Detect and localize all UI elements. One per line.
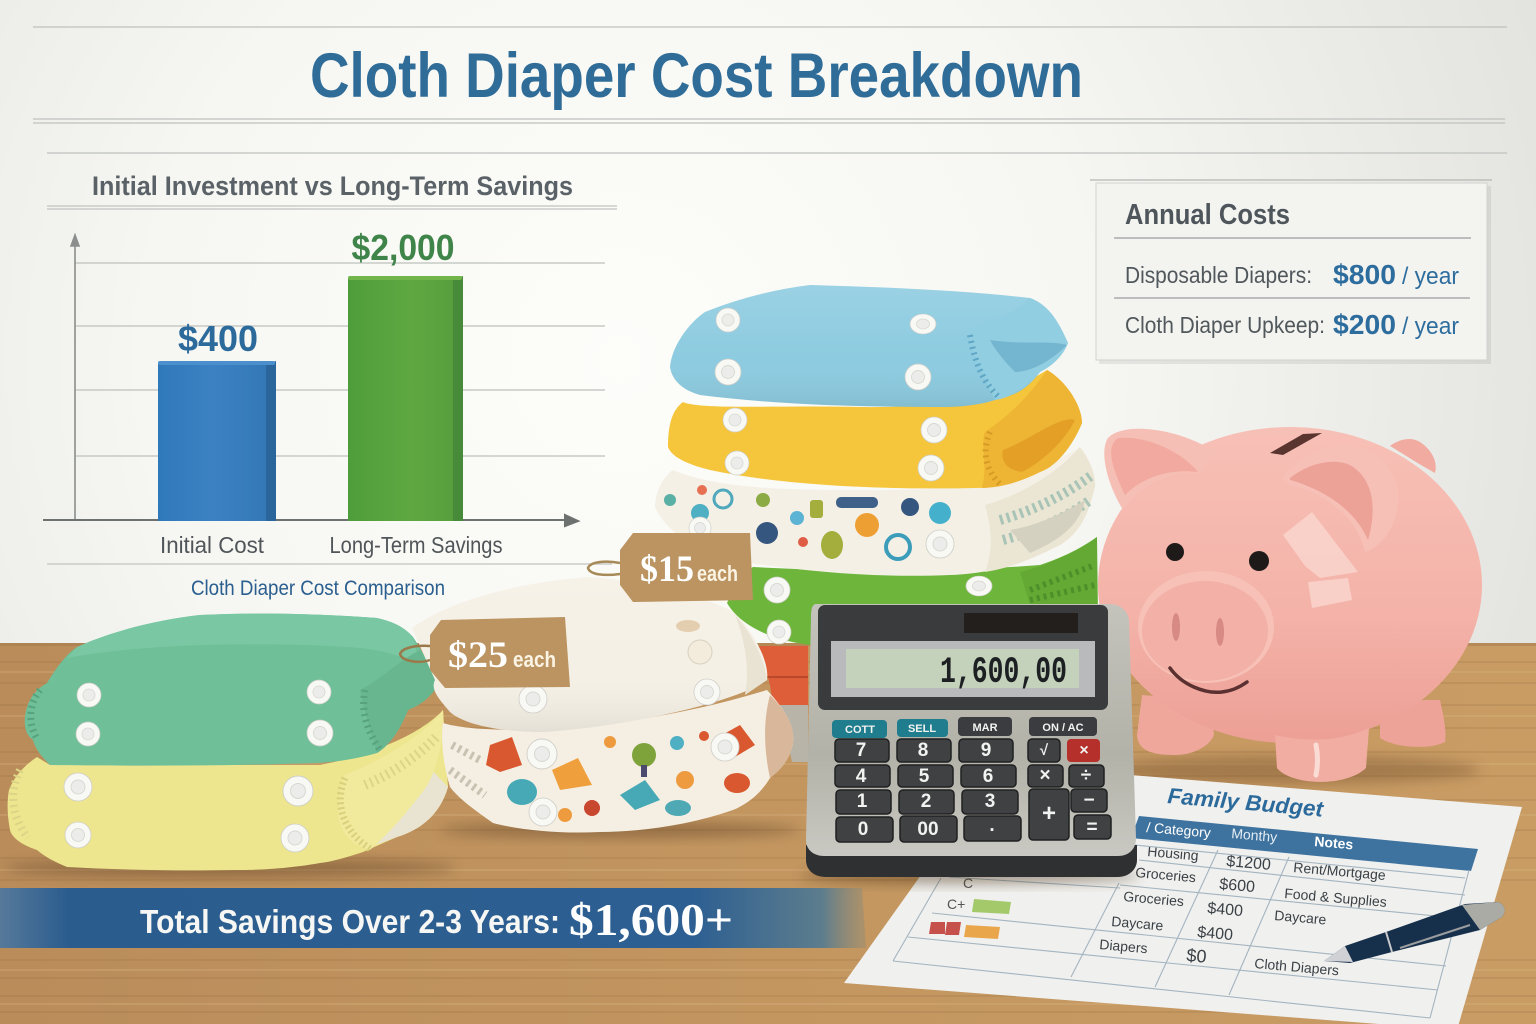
patterned diaper xyxy=(655,447,1095,576)
table header xyxy=(1131,816,1478,871)
keypad: . xyxy=(989,815,995,836)
cloth row: / year xyxy=(1402,313,1459,340)
table rows: Cloth Diapers xyxy=(1254,955,1340,978)
keypad: 6 xyxy=(983,766,993,787)
table rows: Daycare xyxy=(1274,907,1327,928)
piggy bank xyxy=(1098,427,1482,784)
nostrils xyxy=(1172,613,1224,646)
highlight xyxy=(1283,512,1358,608)
display xyxy=(831,641,1095,697)
cloth row: Cloth Diaper Upkeep: xyxy=(1125,312,1325,338)
keypad: SELL xyxy=(908,723,936,735)
green diaper xyxy=(25,614,437,766)
table rows: Diapers xyxy=(1099,936,1148,956)
table rows xyxy=(1099,843,1387,978)
y axis xyxy=(71,235,79,520)
blue diaper xyxy=(670,285,1068,407)
table rows: Rent/Mortgage xyxy=(1293,859,1387,883)
table rows: Groceries xyxy=(1135,864,1197,885)
price tag: $25 each xyxy=(400,617,570,688)
keypad: 5 xyxy=(919,766,930,787)
keypad: 3 xyxy=(985,791,995,812)
keypad: + xyxy=(1042,800,1056,827)
eyes xyxy=(1166,543,1269,571)
keypad: × xyxy=(1079,742,1089,759)
keypad: = xyxy=(1086,817,1098,838)
slot xyxy=(1270,433,1322,455)
keypad: × xyxy=(1039,765,1051,786)
keypad: 1 xyxy=(857,791,868,812)
keypad: 4 xyxy=(856,766,867,787)
keypad: COTT xyxy=(845,724,875,736)
patterned diaper xyxy=(442,690,793,833)
table rows: $600 xyxy=(1219,876,1256,896)
yellow diaper xyxy=(668,370,1082,488)
value: $2,000: $2,000 xyxy=(352,227,454,268)
middle diaper stack xyxy=(412,577,800,838)
table rows: $0 xyxy=(1186,945,1207,967)
table rows: Groceries xyxy=(1123,888,1185,909)
legs xyxy=(1137,695,1214,755)
sheet side labels: C+ xyxy=(947,896,965,912)
keypad: ON / AC xyxy=(1042,722,1084,734)
table rows: $400 xyxy=(1207,900,1244,920)
keypad: √ xyxy=(1040,742,1049,759)
tail ear xyxy=(1390,439,1436,473)
price tag: $15 each: $15 xyxy=(640,549,694,590)
title: Cloth Diaper Cost Breakdown xyxy=(310,41,1083,111)
panel: annual costs xyxy=(1090,180,1492,364)
price tag: $25 each: each xyxy=(513,647,556,672)
keypad: 2 xyxy=(921,791,931,812)
keypad: MAR xyxy=(972,722,998,734)
table header: Monthy xyxy=(1231,825,1278,845)
right diaper stack xyxy=(655,285,1098,762)
keypad: 9 xyxy=(981,740,991,761)
orange diaper xyxy=(756,646,808,762)
table rows: $1200 xyxy=(1226,853,1272,874)
annual costs heading: Annual Costs xyxy=(1125,199,1290,231)
cloth row: $200 xyxy=(1333,309,1396,340)
chart heading: Initial Investment vs Long-Term Savings xyxy=(92,171,573,201)
savings banner xyxy=(0,888,866,948)
price tag: $15 each xyxy=(588,533,753,602)
x axis xyxy=(43,515,578,526)
body xyxy=(1098,427,1482,743)
value: $400: $400 xyxy=(178,318,258,359)
savings banner: $1,600+ xyxy=(569,895,733,945)
front left diaper stack xyxy=(5,614,455,877)
chart caption: Cloth Diaper Cost Comparison xyxy=(191,577,445,600)
sheet side labels xyxy=(929,875,1011,939)
bar: initial cost xyxy=(158,361,276,521)
wooden table xyxy=(0,643,1536,1024)
cloth row xyxy=(1125,309,1459,340)
table rows: Food & Supplies xyxy=(1284,885,1387,910)
calculator xyxy=(800,604,1140,884)
table rows: Housing xyxy=(1147,843,1199,863)
wall background xyxy=(0,0,1536,650)
left ear xyxy=(1104,429,1216,510)
keypad: 8 xyxy=(918,740,928,761)
sheet side labels: C xyxy=(963,875,973,891)
family budget sheet xyxy=(844,775,1522,1024)
disposable row: Disposable Diapers: xyxy=(1125,262,1312,288)
price tag: $15 each: each xyxy=(697,561,738,586)
x labels: Initial Cost xyxy=(160,532,265,558)
cream diaper xyxy=(412,577,767,732)
keypad: − xyxy=(1083,790,1095,811)
keypad: ÷ xyxy=(1081,765,1091,786)
solar panel xyxy=(964,613,1078,633)
keypad: 7 xyxy=(856,740,866,761)
snout xyxy=(1138,571,1274,683)
price tag: $25 each: $25 xyxy=(448,635,508,676)
pen xyxy=(1324,902,1505,963)
keypad: 00 xyxy=(917,819,939,840)
panel: bar chart: Long-Term Savings xyxy=(330,532,502,558)
keypad: 0 xyxy=(858,819,868,840)
banner text: Total Savings Over 2-3 Years: xyxy=(140,903,560,940)
table header: Notes xyxy=(1314,833,1354,852)
table rows: Daycare xyxy=(1111,913,1164,934)
smile xyxy=(1170,668,1247,692)
display: 1,600,00 xyxy=(940,652,1067,694)
yellow diaper xyxy=(8,710,448,870)
table rows: $400 xyxy=(1197,924,1234,944)
sheet title: Family Budget xyxy=(1167,783,1326,822)
disposable row: $800 xyxy=(1333,259,1396,290)
table header: / Category xyxy=(1146,819,1211,841)
right ear xyxy=(1282,446,1399,552)
green diaper xyxy=(727,537,1098,645)
bar: long-term savings xyxy=(348,276,463,521)
disposable row xyxy=(1125,259,1459,290)
disposable row: / year xyxy=(1402,263,1459,290)
keypad xyxy=(832,717,1111,842)
panel: bar chart xyxy=(43,171,617,600)
